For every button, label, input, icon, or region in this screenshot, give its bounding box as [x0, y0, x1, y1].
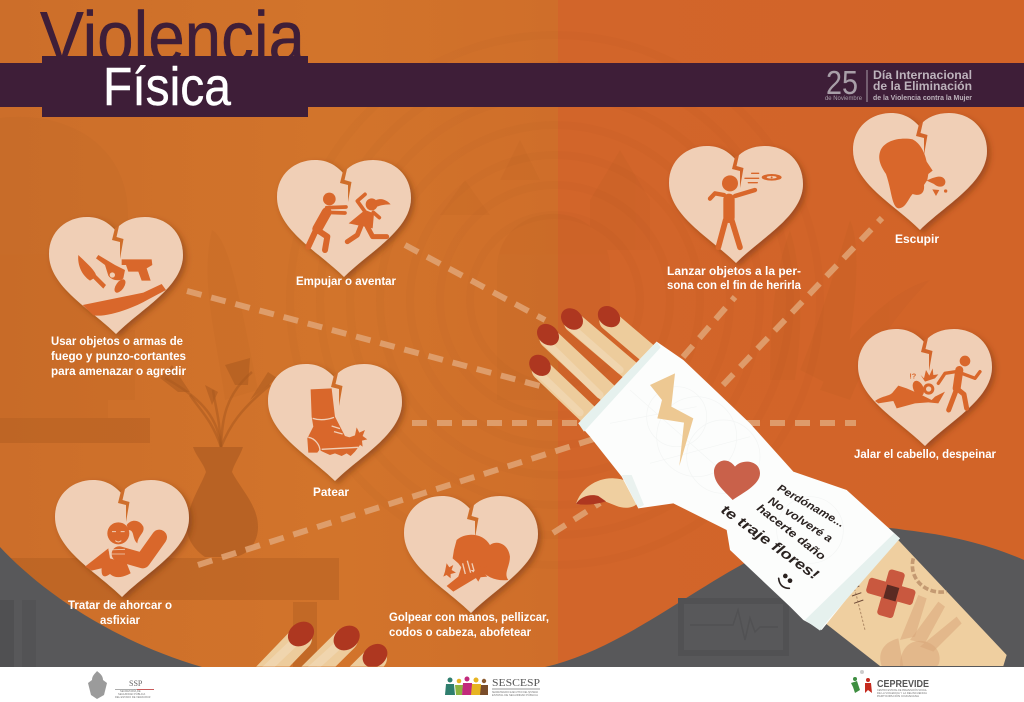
lightning bolt [650, 373, 693, 466]
panel: usar objetos [49, 217, 187, 378]
icon: choking [85, 521, 159, 577]
label: sona con el fin de herirla [667, 280, 802, 292]
label: para amenazar o agredir [51, 366, 187, 378]
label: Usar objetos o armas de [51, 336, 183, 348]
logo: SESCESP: SESCESP [492, 677, 540, 689]
scar stitches [847, 573, 865, 630]
logo: CEPREVIDE: DE LA VIOLENCIA Y LA DELINCUENCIA [877, 691, 927, 695]
panel: tratar de ahorcar [55, 480, 189, 627]
handprint bruise [880, 595, 962, 666]
bandage [865, 569, 916, 619]
heart on cast [714, 460, 760, 500]
label: fuego y punzo-cortantes [51, 351, 186, 363]
handwritten note: Perdóname... [775, 482, 846, 530]
heart [858, 329, 992, 446]
title band [0, 56, 1024, 117]
icon: hair pulling: !? [909, 371, 917, 380]
title: Física: Física [103, 57, 232, 117]
label: codos o cabeza, abofetear [389, 627, 532, 639]
thumb [576, 478, 639, 508]
cuff [578, 342, 661, 432]
logo: CEPREVIDE: CEPREVIDE [877, 679, 929, 690]
date badge: Día Internacional [873, 70, 972, 82]
icon: hair pulling [875, 356, 980, 410]
heart [404, 496, 538, 613]
forearm skin [823, 538, 1007, 666]
label: Empujar o aventar [296, 276, 397, 288]
icon: weapons [78, 255, 166, 316]
date badge: de la Violencia contra la Mujer [873, 93, 972, 102]
handwritten note: hacerte daño [754, 502, 827, 563]
handwritten note: te traje flores! [718, 502, 822, 584]
panel: lanzar objetos [667, 146, 803, 292]
icon: throwing figure [710, 173, 782, 247]
smiley [779, 574, 792, 588]
panel: jalar el cabello [854, 329, 997, 461]
logo: SSP: SEGURIDAD PÚBLICA [118, 691, 146, 696]
dashed connector lines [187, 218, 882, 565]
fingers [525, 302, 652, 416]
heart [268, 364, 402, 481]
icon: boot [307, 388, 367, 456]
logo: SESCESP: ESTATAL DE SEGURIDAD PÚBLICA [492, 692, 538, 697]
date badge: de Noviembre [825, 95, 862, 102]
date badge: de la Eliminación [873, 81, 972, 93]
label: Patear [313, 487, 350, 499]
footer [0, 667, 1024, 702]
panel: empujar [277, 160, 411, 288]
label: Golpear con manos, pellizcar, [389, 612, 549, 624]
shelf and table [0, 418, 339, 667]
logo: CEPREVIDE: CENTRO ESTATAL DE PREVENCIÓN SOCIAL [877, 687, 927, 692]
label [68, 600, 172, 627]
cast [578, 342, 900, 631]
panel: patear [268, 364, 402, 499]
label: Escupir [895, 234, 940, 246]
icon: spitting face [879, 139, 947, 208]
panel: escupir [853, 113, 987, 246]
label: Jalar el cabello, despeinar [854, 449, 997, 461]
icon: slap [443, 535, 510, 592]
logo: SSP: DEL ESTADO DE VERACRUZ [115, 695, 151, 699]
icon: pushing figures [308, 193, 391, 250]
dashed scar [912, 558, 947, 592]
date badge: 25 [826, 64, 858, 101]
title: Violencia: Violencia [40, 0, 306, 78]
label [51, 336, 187, 378]
label: Tratar de ahorcar o [68, 600, 172, 612]
logo: SSP: SSP [129, 679, 143, 688]
date badge [825, 64, 972, 102]
logo: SESCESP [445, 676, 540, 697]
label [667, 266, 802, 292]
panel: golpear [389, 496, 549, 639]
monitor silhouette [681, 601, 786, 653]
injured arm [525, 302, 1007, 666]
heart [277, 160, 411, 277]
label [389, 612, 549, 639]
handwritten note: No volveré a [766, 495, 834, 545]
second hand fingertips [256, 622, 388, 667]
label: asfixiar [100, 615, 141, 627]
heart [669, 146, 803, 263]
handwritten note [718, 482, 846, 584]
grey floor shapes [0, 527, 1024, 667]
logo: SESCESP: SECRETARIADO EJECUTIVO DEL SISTEMA [492, 690, 538, 694]
logo: SSP: SECRETARÍA DE [120, 689, 141, 693]
heart [853, 113, 987, 230]
label: Lanzar objetos a la per- [667, 266, 801, 278]
logo: SSP [88, 671, 154, 699]
flowers and vase [160, 358, 277, 557]
heart [49, 217, 183, 334]
heart [55, 480, 189, 597]
logo: CEPREVIDE: PARTICIPACIÓN CIUDADANA [877, 693, 919, 698]
logo: CEPREVIDE [851, 670, 929, 698]
